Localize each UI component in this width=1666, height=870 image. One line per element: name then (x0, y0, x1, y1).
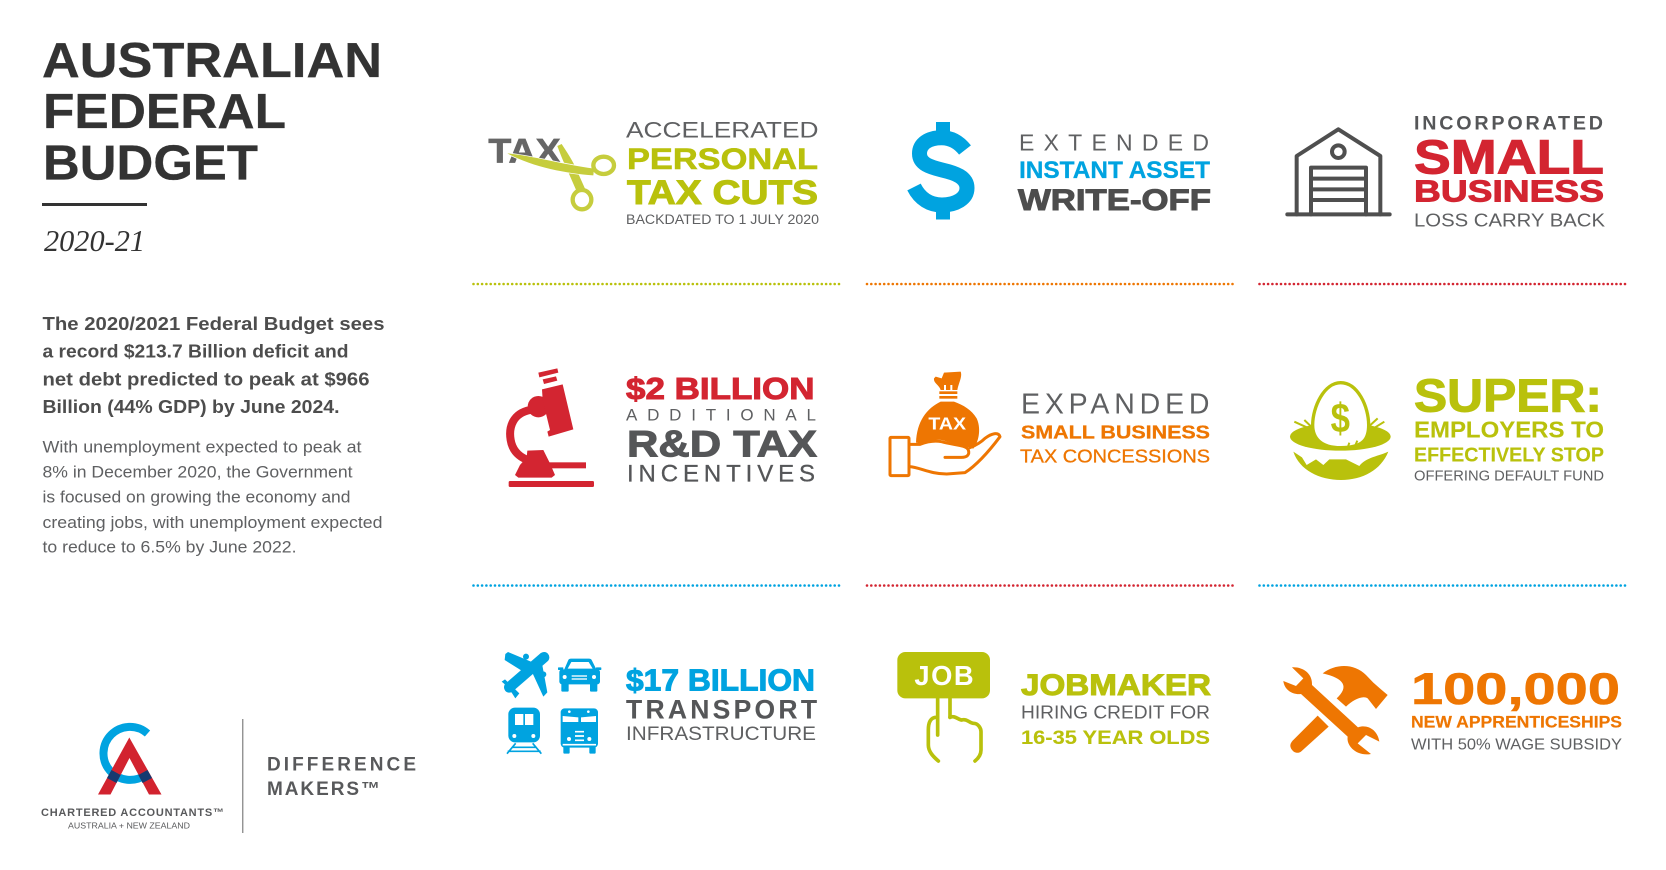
title: FEDERAL (43, 85, 286, 139)
panel: incorporated small business loss carry back (1287, 112, 1606, 230)
subtitle: year: 2020-21 (44, 223, 145, 258)
text: infrastructure: INFRASTRUCTURE (626, 724, 816, 745)
text: transport: TRANSPORT (626, 694, 817, 724)
text: 16-35 year olds: 16-35 YEAR OLDS (1021, 728, 1210, 749)
panel: extended instant asset write-off (914, 122, 1211, 220)
icon: nest egg: $ (1331, 395, 1350, 442)
icon: plane (502, 652, 547, 698)
icon: hammer and wrench (1283, 666, 1388, 754)
text: personal: PERSONAL (627, 143, 818, 176)
text: tax cuts: TAX CUTS (627, 174, 818, 212)
body text: unemployment outlook: 8% in December 2020, the Government (42, 464, 353, 482)
icon: car (558, 659, 601, 692)
text: offering default fund: OFFERING DEFAULT FUND (1414, 468, 1604, 484)
body text: unemployment outlook: is focused on growing the economy and (42, 488, 350, 506)
panel: R&D tax incentives (509, 368, 817, 488)
text: expanded: EXPANDED (1021, 388, 1210, 420)
text: $17 billion: $17 BILLION (626, 662, 815, 698)
text: 100,000: 100,000 (1411, 665, 1620, 714)
logo: Chartered Accountants (41, 719, 416, 833)
text: incentives: INCENTIVES (627, 460, 815, 488)
icon: finger pressing job button: JOB (914, 660, 974, 691)
panel: expanded small business tax concessions (890, 372, 1210, 476)
text: wage subsidy: WITH 50% WAGE SUBSIDY (1411, 736, 1622, 754)
icon: finger pressing job button (897, 652, 990, 761)
text: small business: SMALL BUSINESS (1021, 422, 1210, 442)
body text: unemployment outlook: to reduce to 6.5% by June 2022. (42, 538, 296, 556)
text: super: SUPER: (1414, 370, 1602, 422)
summary text: deficit and debt: a record $213.7 Billion deficit and (42, 342, 348, 362)
icon: garage (1287, 129, 1390, 214)
icon: scissors cutting tax: TAX (488, 133, 561, 171)
text: instant asset: INSTANT ASSET (1019, 157, 1210, 184)
text: employers to: EMPLOYERS TO (1414, 416, 1604, 442)
icon: microscope (509, 368, 594, 487)
summary text: deficit and debt (42, 314, 384, 417)
text: new apprenticeships: NEW APPRENTICESHIPS (1411, 714, 1622, 732)
body text: unemployment outlook (42, 438, 382, 556)
text: loss carry back: LOSS CARRY BACK (1414, 210, 1606, 230)
text: business: BUSINESS (1414, 174, 1604, 208)
panel: new apprenticeships (1283, 665, 1622, 754)
panel: accelerated personal tax cuts (488, 118, 819, 227)
logo text: Chartered Accountants: CHARTERED ACCOUNTANTS™ (41, 807, 224, 819)
title: AUSTRALIAN (42, 34, 382, 88)
icon: CA mark (98, 727, 162, 794)
text: incorporated: INCORPORATED (1414, 112, 1603, 134)
title: BUDGET (43, 136, 258, 190)
icon: bus (561, 708, 598, 754)
panel: super employers (1290, 370, 1604, 484)
text: additional: ADDITIONAL (626, 406, 816, 424)
text: tax concessions: TAX CONCESSIONS (1020, 446, 1210, 466)
tagline: Difference Makers: DIFFERENCE (267, 754, 416, 776)
logo divider (242, 719, 243, 833)
text: extended: EXTENDED (1019, 130, 1209, 156)
text: small: SMALL (1414, 132, 1604, 184)
body text: unemployment outlook: With unemployment expected to peak at (42, 438, 362, 456)
summary text: deficit and debt: The 2020/2021 Federal Budget sees (42, 314, 384, 334)
icon: dollar sign (914, 122, 967, 220)
text: effectively stop: EFFECTIVELY STOP (1414, 444, 1604, 466)
icon: transport modes (502, 652, 601, 754)
panel: jobmaker hiring credit (897, 652, 1211, 761)
logo text: Australia and New Zealand: AUSTRALIA + NEW ZEALAND (68, 822, 190, 830)
text: accelerated: ACCELERATED (626, 118, 818, 142)
text: $2 billion: $2 BILLION (626, 371, 814, 406)
icon: scissors cutting tax (488, 133, 614, 209)
body text: unemployment outlook: creating jobs, with unemployment expected (42, 514, 382, 532)
text: hiring credit for: HIRING CREDIT FOR (1021, 702, 1210, 722)
panel: $17 billion transport infrastructure (502, 652, 817, 754)
text: jobmaker: JOBMAKER (1021, 669, 1211, 702)
summary text: deficit and debt: Billion (44% GDP) by June 2024. (42, 397, 340, 417)
title (42, 34, 382, 190)
tagline: Difference Makers: MAKERS™ (267, 779, 380, 800)
summary text: deficit and debt: net debt predicted to peak at $966 (42, 370, 370, 390)
icon: tax bag on hand (890, 372, 1000, 476)
text: write-off: WRITE-OFF (1018, 184, 1211, 217)
text: R&D tax: R&D TAX (627, 422, 817, 464)
icon: train (507, 708, 541, 754)
panel: introduction sidebar (42, 34, 384, 556)
icon: nest egg (1290, 383, 1391, 480)
icon: tax bag on hand: TAX (928, 413, 966, 433)
tagline: Difference Makers (267, 754, 416, 800)
text: backdated: BACKDATED TO 1 JULY 2020 (626, 212, 819, 227)
title rule (42, 203, 147, 206)
